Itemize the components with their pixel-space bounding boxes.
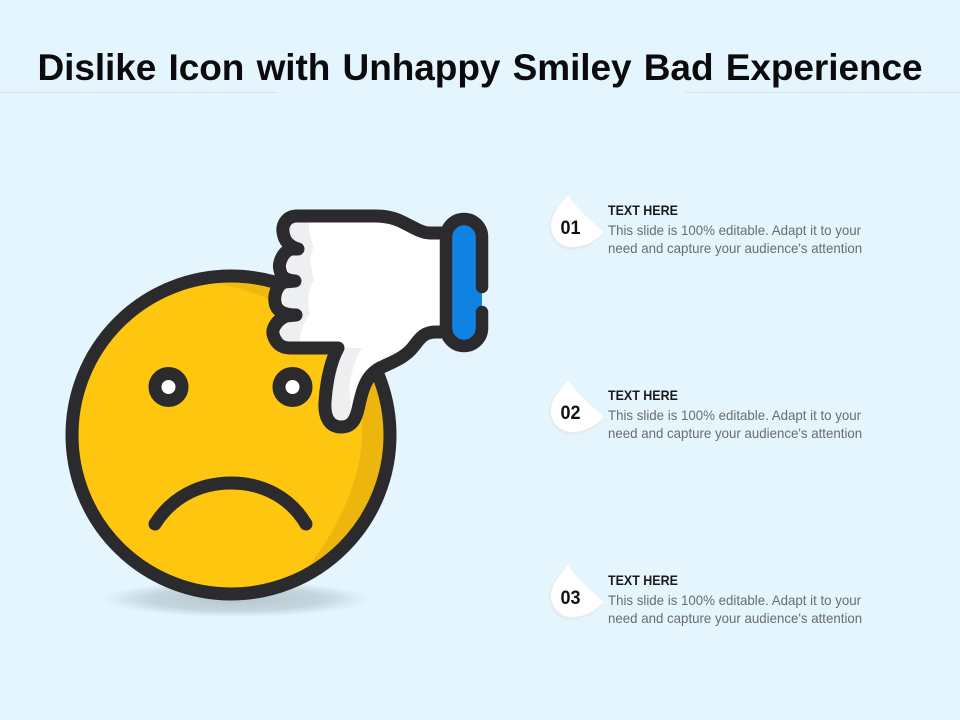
right eye (279, 374, 306, 400)
text block 01: TEXT HERE (608, 202, 678, 218)
left eye (155, 374, 182, 400)
hand shading (280, 220, 314, 344)
text block 03 (608, 572, 862, 626)
badge 01 (549, 195, 604, 250)
text block 03: This slide is 100% editable. Adapt it to your (608, 592, 861, 608)
text block 03: need and capture your audience's attention (608, 610, 862, 626)
illustration: unhappy smiley with thumbs down (66, 195, 604, 620)
smiley shadow (103, 581, 369, 617)
title: Dislike Icon with Unhappy Smiley Bad Experience (37, 47, 923, 88)
badge 01: 01 (560, 217, 581, 239)
left title rule (0, 92, 277, 93)
smiley face (72, 270, 400, 600)
hand fill (273, 216, 442, 427)
hand outline (273, 216, 441, 427)
text block 02: need and capture your audience's attention (608, 425, 862, 441)
text block 03: TEXT HERE (608, 572, 678, 588)
badge 02 (549, 380, 604, 435)
text block 01: need and capture your audience's attention (608, 240, 862, 256)
icon: thumbs down hand (273, 216, 482, 427)
face shading (216, 282, 384, 566)
text block 01 (608, 202, 862, 256)
cuff outline (446, 219, 482, 346)
cuff blue band (450, 224, 482, 342)
text block 02: TEXT HERE (608, 387, 678, 403)
text block 02 (608, 387, 862, 441)
right title rule (685, 92, 960, 93)
badge 03: 03 (560, 587, 581, 609)
text block 02: This slide is 100% editable. Adapt it to your (608, 407, 861, 423)
badge 02: 02 (560, 402, 581, 424)
sad mouth (155, 483, 306, 524)
badge 03 (549, 565, 604, 620)
text block 01: This slide is 100% editable. Adapt it to your (608, 222, 861, 238)
